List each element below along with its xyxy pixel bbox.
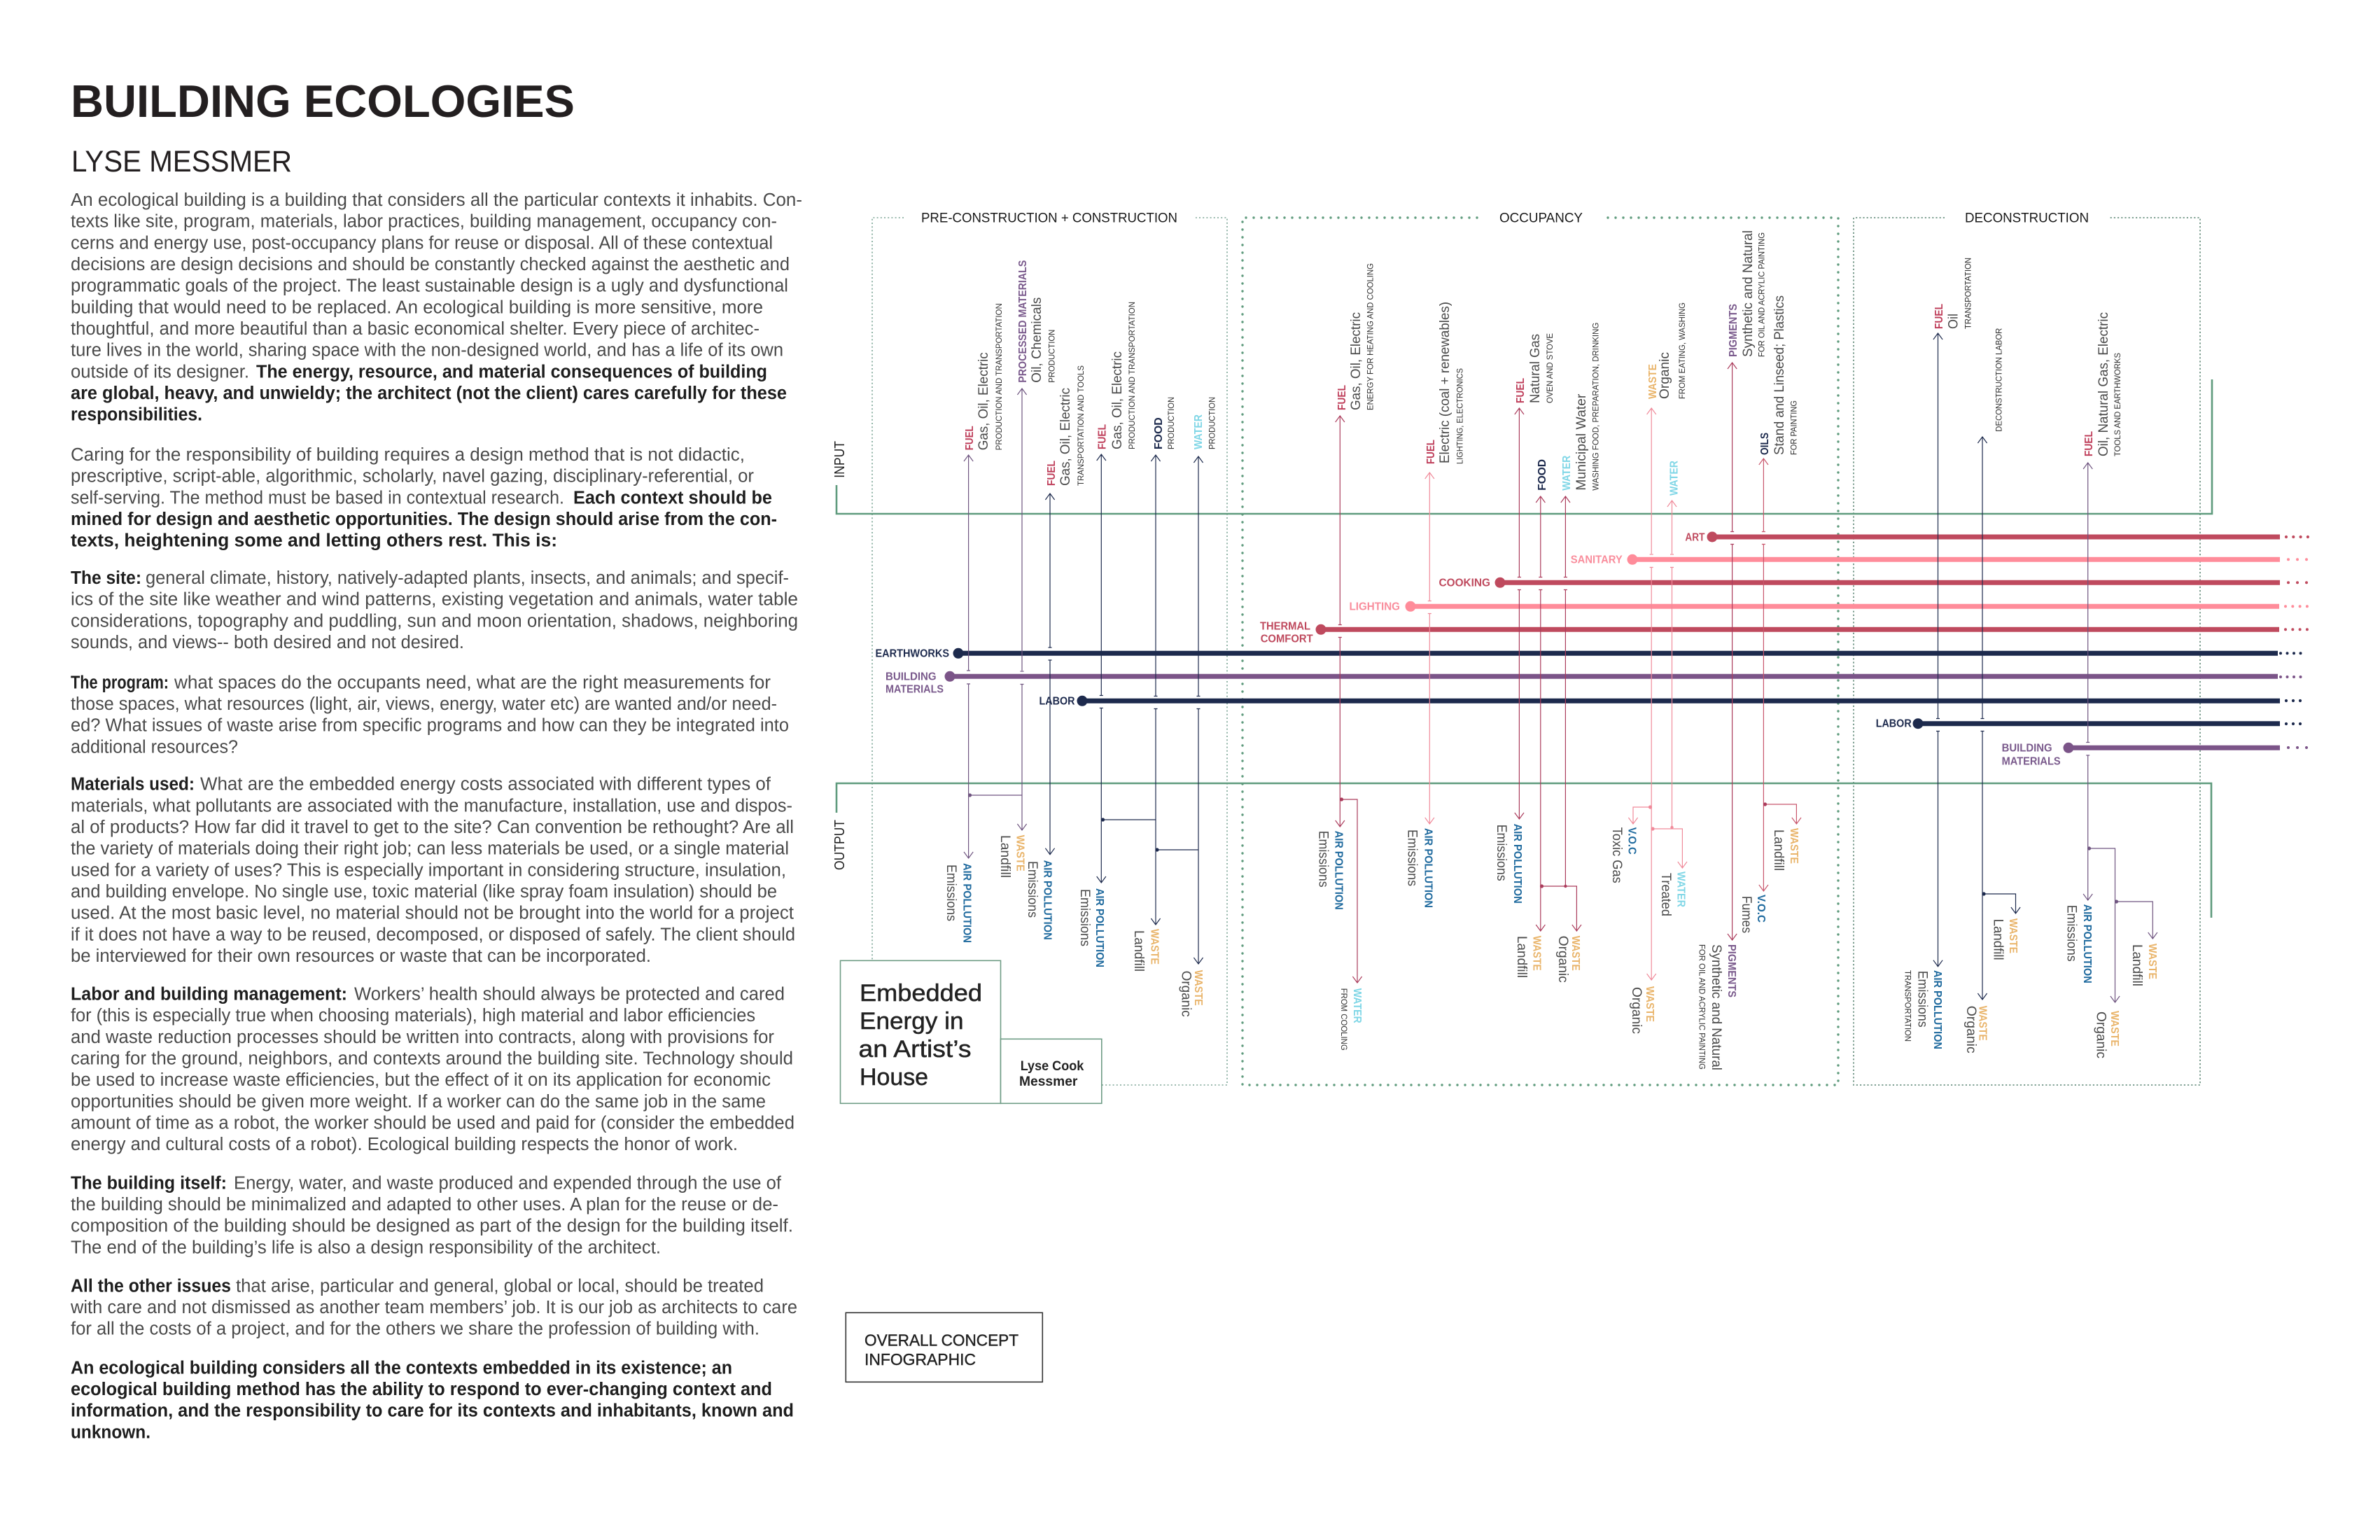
flow: thermal comfort fuel: AIR POLLUTION xyxy=(1332,831,1344,910)
panel frame: pre-construction + construction xyxy=(872,218,1227,1085)
text block: the program: additional resources? xyxy=(71,737,238,757)
flow: sanitary waste: Organic xyxy=(1657,352,1672,399)
flow: deconstruction fuel (tools and earthworks): Emissions xyxy=(2064,905,2080,962)
text block: the program xyxy=(71,673,789,757)
text block: the site: sounds, and views-- both desired and not desired. xyxy=(71,633,464,652)
flow: cooking water: Organic xyxy=(1555,936,1571,983)
flow: art pigments: Synthetic and Natural xyxy=(1709,944,1724,1070)
flow: food (production): PRODUCTION xyxy=(1166,397,1176,449)
flow: deconstruction labor: WASTE xyxy=(1977,1006,1989,1041)
flow: cooking water: WATER xyxy=(1561,455,1573,491)
heading: pre-construction + construction: PRE-CONSTRUCTION + CONSTRUCTION xyxy=(921,211,1177,225)
heading: occupancy: OCCUPANCY xyxy=(1499,211,1583,225)
flow: construction fuel (transportation and tools): TRANSPORTATION AND TOOLS xyxy=(1076,365,1086,486)
flow: sanitary waste: V.O.C xyxy=(1625,827,1638,855)
flow: water (production): Organic xyxy=(1179,971,1194,1017)
text block: materials used: used. At the most basic level, no material should not be brought into the world for a project xyxy=(71,904,794,923)
text block: the program: ed? What issues of waste arise from specific programs and how can they be integrated into xyxy=(71,716,789,736)
project title box: Embedded xyxy=(860,980,982,1007)
flow: water (production): WASTE xyxy=(1192,970,1204,1006)
flow: cooking food: WASTE xyxy=(1530,936,1543,971)
flow: construction fuel (production and transportation, labor): Gas, Oil, Electric xyxy=(1110,351,1125,449)
line: lighting xyxy=(1350,601,2307,613)
text block: materials used xyxy=(71,775,795,966)
flow: construction fuel (transportation and tools): Gas, Oil, Electric xyxy=(1058,388,1073,486)
text block: introduction: ture lives in the world, sharing space with the non-designed world, and has a life of its own xyxy=(71,341,783,360)
text block: labor and building management xyxy=(71,984,794,1154)
project author box: Messmer xyxy=(1019,1074,1078,1089)
text block: design method xyxy=(71,445,777,551)
flow: art oils: Landfill xyxy=(1771,830,1786,871)
flow: art pigments: PIGMENTS xyxy=(1726,944,1737,997)
text block: materials used: materials, what pollutants are associated with the manufacture, installation, use and dispos- xyxy=(71,796,792,816)
text block: materials used: be interviewed for their own resources or waste that can be incorporated. xyxy=(71,946,651,966)
text block: conclusion xyxy=(71,1358,794,1442)
text block: conclusion: ecological building method has the ability to respond to ever-changing context and xyxy=(71,1380,772,1399)
line: sanitary xyxy=(1571,554,2307,566)
flow: cooking water: Municipal Water xyxy=(1574,393,1589,491)
flow: construction fuel (transportation and tools): Emissions xyxy=(1025,861,1040,918)
text block: materials used: What are the embedded energy costs associated with different types of xyxy=(200,775,771,794)
flow: lighting electric: LIGHTING, ELECTRONICS xyxy=(1455,368,1464,464)
flow: construction fuel (production and transportation, labor) xyxy=(1077,302,1156,967)
project author box xyxy=(1001,1039,1102,1103)
flow: deconstruction labor: DECONSTRUCTION LABOR xyxy=(1994,328,2004,432)
flow: cooking fuel: OVEN AND STOVE xyxy=(1545,333,1555,403)
text block: introduction: texts like site, program, materials, labor practices, building management, occupancy con- xyxy=(71,212,777,232)
text block: labor and building management: energy and cultural costs of a robot). Ecological building respects the honor of work. xyxy=(71,1135,738,1154)
flow: deconstruction fuel (transportation): FUEL xyxy=(1933,304,1945,329)
flow: water (production): WATER xyxy=(1193,414,1205,449)
flow: deconstruction fuel (transportation): TRANSPORTATION xyxy=(1963,258,1973,329)
flow: cooking fuel xyxy=(1494,333,1555,904)
flow: cooking fuel: FUEL xyxy=(1515,378,1527,403)
flow: sanitary waste: FROM EATING, WASHING xyxy=(1677,302,1687,399)
flow: construction fuel (production and transportation, labor): AIR POLLUTION xyxy=(1093,888,1105,967)
author name: LYSE MESSMER xyxy=(71,145,292,178)
text block: introduction: outside of its designer. xyxy=(71,362,249,382)
flow: water (production): PRODUCTION xyxy=(1207,397,1217,449)
flow: thermal comfort fuel: ENERGY FOR HEATING AND COOLING xyxy=(1365,263,1375,410)
flow: lighting electric xyxy=(1404,302,1464,908)
flow: lighting electric: FUEL xyxy=(1425,440,1437,464)
text block: conclusion: unknown. xyxy=(71,1422,150,1442)
flow: thermal comfort fuel: FUEL xyxy=(1336,385,1348,410)
flow: construction fuel (production and transportation): PRODUCTION AND TRANSPORTATION xyxy=(994,303,1004,450)
text block: the site: The site: xyxy=(71,568,141,588)
line: art: ART xyxy=(1685,532,1705,544)
text block: the site: considerations, topography and puddling, sun and moon orientation, shadows, neighboring xyxy=(71,611,798,631)
panel frame: deconstruction xyxy=(1854,218,2200,1085)
text block: the site xyxy=(71,568,798,652)
text block: the building itself: The building itself: xyxy=(71,1173,227,1193)
flow: construction fuel (production and transportation, labor): FUEL xyxy=(1097,424,1109,449)
flow: deconstruction labor: WASTE xyxy=(2007,918,2019,953)
flow: deconstruction fuel (transportation): AIR POLLUTION xyxy=(1931,970,1943,1049)
text block: introduction: An ecological building is a building that considers all the particular contexts it inhabits. Con- xyxy=(71,190,802,210)
flow: cooking water: WASTE xyxy=(1569,936,1581,971)
flow: sanitary waste: Toxic Gas xyxy=(1609,827,1625,883)
text block: introduction xyxy=(71,190,802,425)
line: earthworks xyxy=(875,648,2307,659)
text block: the building itself xyxy=(71,1173,793,1257)
flow: deconstruction fuel (tools and earthworks): FUEL xyxy=(2083,431,2095,456)
text block: the building itself: The end of the building’s life is also a design responsibility of the architect. xyxy=(71,1238,661,1257)
text block: all the other issues: with care and not dismissed as another team members’ job. It is our job as architects to care xyxy=(70,1298,797,1317)
flow: deconstruction labor: Landfill xyxy=(1990,919,2005,960)
flow: deconstruction fuel (tools and earthworks): Oil, Natural Gas, Electric xyxy=(2096,312,2111,456)
overall concept infographic label: INFOGRAPHIC xyxy=(864,1350,976,1368)
project title box: an Artist’s xyxy=(858,1036,972,1063)
line: labor (construction) xyxy=(1039,695,2307,707)
flow: sanitary waste xyxy=(1609,302,1687,1034)
text block: design method: Each context should be xyxy=(573,488,772,507)
line: labor (construction): LABOR xyxy=(1039,695,1075,707)
text block: the building itself: Energy, water, and waste produced and expended through the use of xyxy=(234,1173,782,1193)
flow: construction fuel (transportation and tools): FUEL xyxy=(1046,461,1058,486)
text block: labor and building management: opportunities should be given more weight. If a worker can do the same job in the same xyxy=(71,1092,766,1112)
text block: design method: Caring for the responsibility of building requires a design method that is not didactic, xyxy=(71,445,745,465)
flow: cooking fuel: Emissions xyxy=(1494,825,1509,881)
text block: materials used: used for a variety of uses? This is especially important in considering structure, insulation, xyxy=(71,860,786,880)
flow: thermal comfort fuel: WATER xyxy=(1351,988,1363,1023)
flow: sanitary waste: Treated xyxy=(1658,873,1674,916)
flow: construction fuel (production and transportation): AIR POLLUTION xyxy=(960,863,972,943)
flow: deconstruction fuel (transportation): TRANSPORTATION xyxy=(1903,970,1912,1042)
flow: construction fuel (transportation and tools): AIR POLLUTION xyxy=(1042,860,1054,940)
line: thermal comfort: THERMAL xyxy=(1260,620,1310,632)
flow: construction fuel (production and transportation): Gas, Oil, Electric xyxy=(976,352,991,450)
project author box: Lyse Cook xyxy=(1021,1059,1084,1074)
flow: lighting electric: Electric (coal + renewables) xyxy=(1437,302,1452,463)
flow: deconstruction fuel (tools and earthworks): Landfill xyxy=(2129,944,2145,986)
input bracket xyxy=(836,379,2212,514)
text block: labor and building management: be used to increase waste efficiencies, but the effect of it on its application for economic xyxy=(71,1070,771,1090)
text block: the building itself: the building should be minimalized and adapted to other uses. A plan for the reuse or de- xyxy=(71,1195,778,1214)
flow: art oils: Stand and Linseed; Plastics xyxy=(1772,295,1787,455)
flow: art oils xyxy=(1739,295,1801,933)
flow: art pigments: Synthetic and Natural xyxy=(1740,230,1756,357)
flow: deconstruction fuel (tools and earthworks): TOOLS AND EARTHWORKS xyxy=(2113,353,2122,456)
project title box: House xyxy=(860,1064,928,1091)
flow: deconstruction fuel (tools and earthworks): Organic xyxy=(2093,1011,2108,1058)
flow: cooking water: WASHING FOOD, PREPARATION, DRINKING xyxy=(1590,323,1600,491)
flow: sanitary waste: WASTE xyxy=(1644,986,1656,1022)
flow: art pigments: FOR OIL AND ACRYLIC PAINTING xyxy=(1757,232,1767,357)
line: building materials (deconstruction) xyxy=(2002,742,2307,767)
flow: thermal comfort fuel: Gas, Oil, Electric xyxy=(1348,312,1364,410)
line: thermal comfort: COMFORT xyxy=(1261,633,1313,645)
flow: deconstruction labor: Organic xyxy=(1963,1006,1979,1054)
flow: food (production): WASTE xyxy=(1148,929,1160,965)
text block: labor and building management: amount of time as a robot, the worker should be used and paid for (consider the embedded xyxy=(71,1113,794,1133)
flow: thermal comfort fuel: FROM COOLING xyxy=(1339,988,1349,1051)
flow: processed materials: PROCESSED MATERIALS xyxy=(1017,260,1029,383)
flow: thermal comfort fuel xyxy=(1316,263,1375,1051)
flow: construction fuel (transportation and tools) xyxy=(1025,365,1086,940)
text block: labor and building management: caring for the ground, neighbors, and contexts around the building site. Technology should xyxy=(71,1049,793,1068)
text block: the site: ics of the site like weather and wind patterns, existing vegetation and animals, water table xyxy=(71,590,798,610)
flow: deconstruction fuel (tools and earthworks) xyxy=(2064,312,2158,1058)
flow: cooking food: FOOD xyxy=(1536,459,1548,491)
title: BUILDING ECOLOGIES xyxy=(71,76,575,127)
flow: food (production) xyxy=(1131,397,1198,972)
flow: cooking fuel: AIR POLLUTION xyxy=(1511,824,1523,904)
text block: introduction: decisions are design decisions and should be constantly checked against the aesthetic and xyxy=(71,255,790,274)
output label: OUTPUT xyxy=(832,820,848,870)
flow: construction fuel (production and transportation) xyxy=(944,303,1022,943)
flow: food (production): Landfill xyxy=(1131,930,1147,972)
flow: food (production): FOOD xyxy=(1153,417,1165,449)
flow: lighting electric: Emissions xyxy=(1404,830,1420,886)
text block: introduction: thoughtful, and more beautiful than a basic economical shelter. Every piece of architec- xyxy=(71,319,760,339)
line: sanitary: SANITARY xyxy=(1571,554,1623,566)
flow: sanitary waste: WATER xyxy=(1674,872,1687,907)
flow: deconstruction fuel (transportation): Oil xyxy=(1946,314,1961,329)
flow: sanitary water xyxy=(1667,461,1680,829)
text block: materials used: the variety of materials doing their right job; can less materials be used, or a single material xyxy=(71,839,789,859)
text block: all the other issues: for all the costs of a project, and for the others we share the profession of building with. xyxy=(71,1320,760,1339)
flow: deconstruction fuel (transportation): Emissions xyxy=(1914,971,1930,1028)
flow: deconstruction fuel (tools and earthworks): AIR POLLUTION xyxy=(2081,904,2093,983)
project title box xyxy=(840,960,1001,1103)
line: building materials xyxy=(886,671,2307,696)
line: cooking: COOKING xyxy=(1439,577,1490,589)
text block: materials used: if it does not have a way to be reused, decomposed, or disposed of safely. The client should xyxy=(71,925,795,944)
text block: design method: mined for design and aesthetic opportunities. The design should arise from the con- xyxy=(71,510,777,529)
line: lighting: LIGHTING xyxy=(1350,601,1400,613)
text block: labor and building management: Workers’ health should always be protected and cared xyxy=(354,984,785,1004)
text block: introduction: programmatic goals of the project. The least sustainable design is a ugly and dysfunctional xyxy=(71,276,788,296)
flow: processed materials: WASTE xyxy=(1014,835,1026,872)
flow: art pigments: FOR OIL AND ACRYLIC PAINTING xyxy=(1697,944,1707,1070)
line: building materials (deconstruction): MATERIALS xyxy=(2002,755,2061,767)
text block: introduction: cerns and energy use, post-occupancy plans for reuse or disposal. All of these contextual xyxy=(71,233,773,253)
panel frame: occupancy xyxy=(1242,218,1838,1085)
line: building materials (deconstruction): BUILDING xyxy=(2002,742,2052,755)
input label: INPUT xyxy=(832,441,848,478)
line: art xyxy=(1685,532,2308,544)
flow: deconstruction fuel (tools and earthworks): WASTE xyxy=(2108,1011,2120,1046)
flow: deconstruction fuel (transportation) xyxy=(1903,258,1973,1049)
flow: thermal comfort fuel: Emissions xyxy=(1316,831,1331,888)
text block: labor and building management: Labor and building management: xyxy=(71,984,347,1004)
text block: design method: prescriptive, script-able, algorithmic, scholarly, navel gazing, disciplinary-referential, or xyxy=(71,467,755,486)
flow: processed materials: Landfill xyxy=(997,835,1013,878)
flow: construction fuel (production and transportation): FUEL xyxy=(964,426,976,450)
line: building materials: MATERIALS xyxy=(886,683,944,696)
flow: cooking food: Landfill xyxy=(1514,936,1530,978)
flow: water (production) xyxy=(1179,397,1217,1017)
heading: deconstruction: DECONSTRUCTION xyxy=(1965,211,2089,225)
flow: construction fuel (production and transportation, labor): PRODUCTION AND TRANSPORTATION xyxy=(1127,302,1137,449)
flow: art oils: Fumes xyxy=(1739,896,1754,933)
flow: art oils: OILS xyxy=(1759,433,1771,455)
text block: the building itself: composition of the building should be designed as part of the design for the building itself. xyxy=(71,1217,793,1236)
text block: the program: The program: xyxy=(71,673,169,692)
flow: construction fuel (production and transportation): Emissions xyxy=(944,864,959,921)
flow: sanitary waste: Organic xyxy=(1629,987,1644,1034)
text block: design method: self-serving. The method must be based in contextual research. xyxy=(71,488,564,507)
flow: processed materials: PRODUCTION xyxy=(1046,330,1056,383)
flow: art oils: V.O.C xyxy=(1755,895,1767,923)
project title box: Energy in xyxy=(860,1008,963,1035)
flow: construction fuel (production and transportation, labor): Emissions xyxy=(1077,889,1093,946)
text block: materials used: al of products? How far did it travel to get to the site? Can convention be rethought? Are all xyxy=(71,818,794,837)
text block: introduction: building that would need to be replaced. An ecological building is more sensitive, more xyxy=(71,298,763,317)
line: labor (deconstruction) xyxy=(1876,718,2307,729)
text block: all the other issues xyxy=(70,1276,797,1339)
overall concept infographic label xyxy=(846,1312,1042,1382)
output bracket xyxy=(836,783,2211,918)
flow: deconstruction labor xyxy=(1963,328,2020,1054)
flow: art oils: FOR PAINTING xyxy=(1789,400,1799,455)
text block: conclusion: information, and the responsibility to care for its contexts and inhabitants, known and xyxy=(71,1401,794,1421)
flow: sanitary waste: WASTE xyxy=(1647,364,1659,399)
line: thermal comfort xyxy=(1260,620,2307,645)
flow: processed materials: Oil, Chemicals xyxy=(1029,297,1044,383)
text block: labor and building management: and waste reduction processes should be written into contracts, along with provisions for xyxy=(71,1028,774,1047)
text block: introduction: are global, heavy, and unwieldy; the architect (not the client) cares carefully for these xyxy=(71,384,787,403)
text block: design method: texts, heightening some and letting others rest. This is: xyxy=(71,531,557,551)
text block: materials used: Materials used: xyxy=(71,775,195,794)
overall concept infographic label: OVERALL CONCEPT xyxy=(864,1331,1018,1350)
text block: introduction: The energy, resource, and material consequences of building xyxy=(256,362,767,382)
text block: materials used: and building envelope. No single use, toxic material (like spray foam insulation) should be xyxy=(71,882,777,902)
text block: the site: general climate, history, natively-adapted plants, insects, and animals; and specif- xyxy=(146,568,789,588)
flow: cooking food xyxy=(1514,459,1548,978)
line: earthworks: EARTHWORKS xyxy=(875,648,949,659)
flow: art pigments: PIGMENTS xyxy=(1728,304,1740,357)
text block: the program: those spaces, what resources (light, air, views, energy, water etc) are wanted and/or need- xyxy=(71,694,777,714)
text block: introduction: responsibilities. xyxy=(71,405,202,425)
text block: all the other issues: All the other issues xyxy=(71,1276,231,1296)
flow: art oils: WASTE xyxy=(1788,828,1800,864)
text block: labor and building management: for (this is especially true when choosing materials), high material and labor efficiencies xyxy=(71,1006,755,1026)
line: labor (deconstruction): LABOR xyxy=(1876,718,1912,729)
flow: cooking fuel: Natural Gas xyxy=(1527,334,1543,403)
flow: sanitary water: WATER xyxy=(1669,461,1680,496)
line: cooking xyxy=(1439,577,2307,589)
flow: lighting electric: AIR POLLUTION xyxy=(1422,828,1434,908)
flow: deconstruction fuel (tools and earthworks): WASTE xyxy=(2146,944,2158,979)
flow: cooking water xyxy=(1540,323,1600,983)
text block: all the other issues: that arise, particular and general, global or local, should be treated xyxy=(236,1276,764,1296)
flow: art pigments xyxy=(1697,230,1767,1070)
flow: processed materials xyxy=(997,260,1056,878)
text block: conclusion: An ecological building considers all the contexts embedded in its existence; an xyxy=(71,1358,732,1378)
text block: the program: what spaces do the occupants need, what are the right measurements for xyxy=(174,673,771,692)
line: building materials: BUILDING xyxy=(886,671,937,683)
